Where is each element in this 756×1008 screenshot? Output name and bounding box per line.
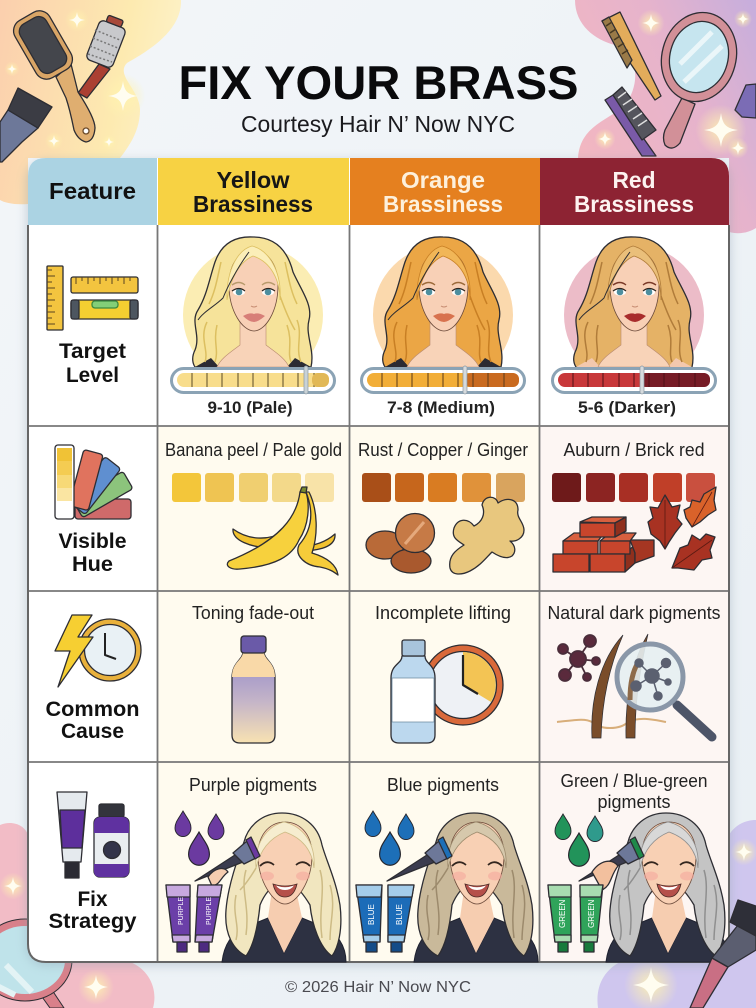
row label: Fix Strategy: Fix (78, 888, 108, 911)
portrait: beige blonde (414, 813, 538, 962)
icon: toner bottle (232, 636, 275, 743)
row label: Visible Hue (55, 445, 133, 576)
icon: lightning and clock (55, 615, 141, 687)
cell: yellow common cause (192, 603, 314, 743)
header: Yellow Brassiness: Brassiness (193, 191, 313, 217)
comparison table (28, 158, 729, 962)
cell: orange visible hue (358, 440, 528, 574)
row label: Fix Strategy (48, 792, 137, 933)
drops: green (555, 814, 603, 866)
cell: yellow fix strategy: Purple pigments (189, 775, 317, 795)
toner tubes: purple (166, 885, 222, 952)
cell: orange fix strategy: Blue pigments (387, 775, 499, 795)
cell: yellow target level (172, 237, 334, 417)
icon: swatch fan (55, 445, 133, 519)
icon: banana peel (227, 487, 338, 575)
cell: red fix strategy: Green / Blue-green (560, 771, 708, 791)
cell: red fix strategy (548, 771, 730, 962)
icon: autumn leaves (648, 487, 716, 570)
header: Red Brassiness (540, 158, 729, 225)
portrait: ash blonde (222, 813, 346, 962)
row label: Target Level: Level (66, 364, 119, 387)
icon: bottom right brush (690, 900, 756, 1008)
header: Orange Brassiness (350, 158, 540, 225)
corner decoration: bottom right blob (597, 820, 756, 1008)
cell: orange target level: 7-8 (Medium) (387, 399, 495, 417)
cell: red common cause: Natural dark pigments (548, 603, 720, 623)
row label: Visible Hue: Hue (72, 553, 113, 576)
toner tubes: green (548, 885, 603, 952)
tint brush (195, 837, 260, 886)
header: Yellow Brassiness: Yellow (216, 167, 290, 193)
swatches (552, 473, 715, 502)
header: Feature: Feature (49, 178, 136, 204)
level bar (552, 366, 716, 394)
toner tubes: blue: BLUE (395, 904, 404, 925)
cell: orange common cause: Incomplete lifting (375, 603, 511, 623)
tint brush (579, 837, 644, 890)
icon: bottom left mirror (0, 919, 72, 1008)
cell: red common cause (548, 603, 720, 738)
icon: ruler and level (47, 266, 138, 330)
row label: Target Level (47, 266, 138, 387)
toner tubes: purple: PURPLE (206, 897, 213, 925)
level bar (362, 366, 524, 394)
cell: orange fix strategy (356, 775, 538, 962)
corner decoration: bottom left blob (0, 823, 154, 1008)
header: Orange Brassiness: Orange (401, 167, 485, 193)
icon: magnifier (617, 644, 712, 737)
cell: orange visible hue: Rust / Copper / Ginger (358, 440, 528, 460)
row label: Common Cause: Cause (61, 720, 124, 743)
cell: red fix strategy: pigments (598, 792, 670, 812)
cell: red target level: 5-6 (Darker) (578, 399, 676, 417)
header: Red Brassiness: Brassiness (574, 191, 694, 217)
icon: purple clip (735, 84, 756, 118)
cell: yellow target level: 9-10 (Pale) (208, 399, 292, 417)
portrait: silver (606, 813, 730, 962)
icon: hair follicles (557, 634, 666, 738)
cell: red visible hue: Auburn / Brick red (564, 440, 704, 460)
icon: hand mirror (652, 4, 746, 148)
icon: purple comb (605, 87, 656, 156)
icon: pigment molecule (558, 635, 600, 681)
cell: yellow visible hue (165, 440, 342, 575)
corner decoration: top right blob (575, 0, 756, 233)
header: Red Brassiness: Red (612, 167, 656, 193)
icon: copper pennies (366, 514, 434, 573)
icon: sparkles top right (594, 10, 752, 158)
icon: tint brush (0, 88, 52, 162)
row label: Target Level: Target (59, 340, 126, 363)
icon: developer bottle (391, 640, 435, 743)
title: FIX YOUR BRASS (178, 56, 578, 109)
cell: red target level (552, 237, 716, 417)
table shadow (26, 160, 731, 966)
tint brush (387, 837, 452, 881)
cell: orange target level (362, 237, 524, 417)
icon: sparkles top left (4, 8, 146, 150)
row label: Common Cause: Common (46, 698, 140, 721)
portrait: golden orange (383, 237, 502, 367)
toner tubes: green: GREEN (558, 899, 567, 928)
row label: Common Cause (46, 615, 141, 743)
icon: toner tube and bottle (57, 792, 129, 878)
drops: purple (175, 811, 224, 865)
swatches (362, 473, 525, 502)
header: Orange Brassiness: Brassiness (383, 191, 503, 217)
corner decoration: top left blob (0, 0, 181, 204)
swatches (172, 473, 334, 502)
cell: red visible hue (552, 440, 716, 572)
row label: Visible Hue: Visible (58, 530, 126, 553)
icon: bricks (553, 517, 654, 572)
level bar (172, 366, 334, 394)
icon: wide comb (602, 12, 661, 100)
icon: round brush (78, 15, 127, 98)
subtitle: Courtesy Hair N’ Now NYC (241, 111, 515, 137)
toner tubes: blue (356, 885, 414, 952)
icon: sparkles bottom right (624, 838, 756, 1008)
toner tubes: purple: PURPLE (178, 897, 185, 925)
icon: ginger root (450, 497, 524, 574)
icon: paddle brush (9, 6, 95, 142)
cell: yellow common cause: Toning fade-out (192, 603, 314, 623)
portrait: warm dark blonde (574, 237, 693, 367)
cell: yellow fix strategy (166, 775, 346, 962)
cell: yellow visible hue: Banana peel / Pale gold (165, 440, 342, 460)
icon: sparkles bottom left (0, 872, 114, 1005)
drops: blue (365, 811, 414, 865)
row label: Fix Strategy: Strategy (48, 910, 137, 933)
footer: © 2026 Hair N’ Now NYC (285, 979, 471, 996)
cell: orange common cause (375, 603, 511, 743)
icon: clock (423, 645, 503, 725)
header: Yellow Brassiness (158, 158, 349, 225)
portrait: pale blonde (193, 237, 312, 367)
cell tints (158, 426, 729, 962)
toner tubes: blue: BLUE (367, 904, 376, 925)
toner tubes: green: GREEN (587, 899, 596, 928)
header: Feature (28, 158, 157, 225)
